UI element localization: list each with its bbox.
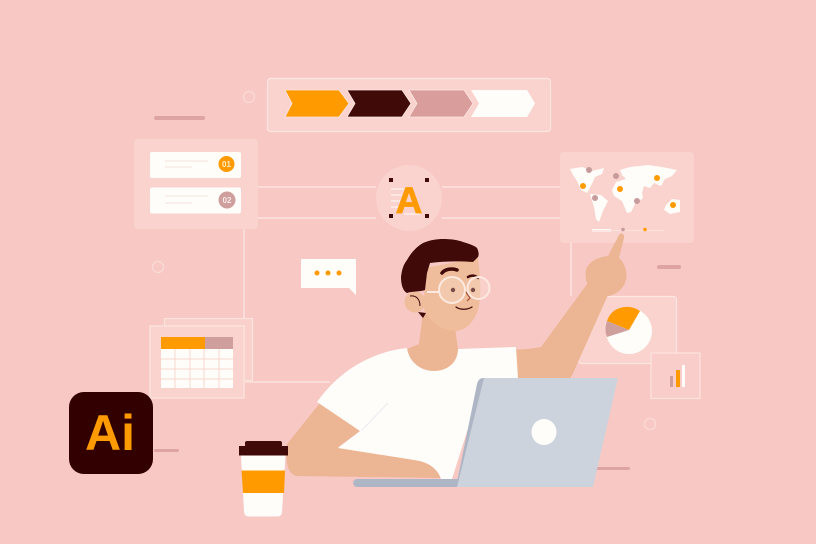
eyes bbox=[451, 288, 455, 292]
panel: calendar table bbox=[150, 318, 252, 398]
ear bbox=[404, 292, 426, 312]
neck bbox=[407, 312, 458, 371]
hair bbox=[401, 239, 479, 293]
right arm bbox=[505, 280, 612, 380]
cup body bbox=[241, 456, 286, 516]
panel: world map bbox=[560, 152, 694, 243]
laptop logo bbox=[532, 419, 556, 445]
head bbox=[424, 258, 480, 331]
Illustrator logo bbox=[69, 392, 153, 474]
hand bbox=[586, 234, 626, 297]
world map continents bbox=[570, 165, 680, 222]
cup sleeve bbox=[242, 470, 285, 493]
icon: type tool badge bbox=[376, 165, 442, 231]
list row 01: 01 bbox=[222, 160, 231, 169]
arrow step 2 bbox=[347, 90, 411, 117]
arrow step 4 bbox=[471, 90, 535, 117]
glasses bbox=[427, 277, 490, 303]
arrow step 1 bbox=[285, 90, 349, 117]
list row 02: 02 bbox=[223, 196, 232, 205]
panel: numbered list bbox=[134, 139, 258, 229]
nose and mouth bbox=[465, 291, 470, 301]
eyebrows bbox=[442, 269, 457, 273]
speech bubble bbox=[301, 259, 356, 295]
panel: pie chart bbox=[578, 296, 676, 364]
laptop bbox=[353, 378, 618, 487]
panel: process arrows bbox=[268, 78, 550, 132]
Illustrator logo: Ai bbox=[85, 405, 135, 461]
table grid bbox=[161, 349, 233, 388]
bars bbox=[670, 365, 685, 387]
panel: small bar chart bbox=[651, 353, 700, 398]
cup lid bbox=[245, 441, 282, 447]
coffee cup bbox=[239, 441, 288, 516]
map legend bbox=[592, 228, 664, 232]
pie chart bbox=[606, 307, 652, 354]
person bbox=[286, 234, 626, 479]
arrow step 3 bbox=[409, 90, 473, 117]
left arm bbox=[286, 403, 441, 478]
icon: type tool badge: A bbox=[396, 180, 422, 221]
laptop screen bbox=[457, 378, 618, 487]
table header bbox=[161, 337, 233, 349]
map pins bbox=[580, 167, 676, 208]
laptop hinge edge bbox=[456, 378, 490, 487]
shirt bbox=[317, 347, 518, 479]
laptop base bbox=[353, 479, 462, 487]
